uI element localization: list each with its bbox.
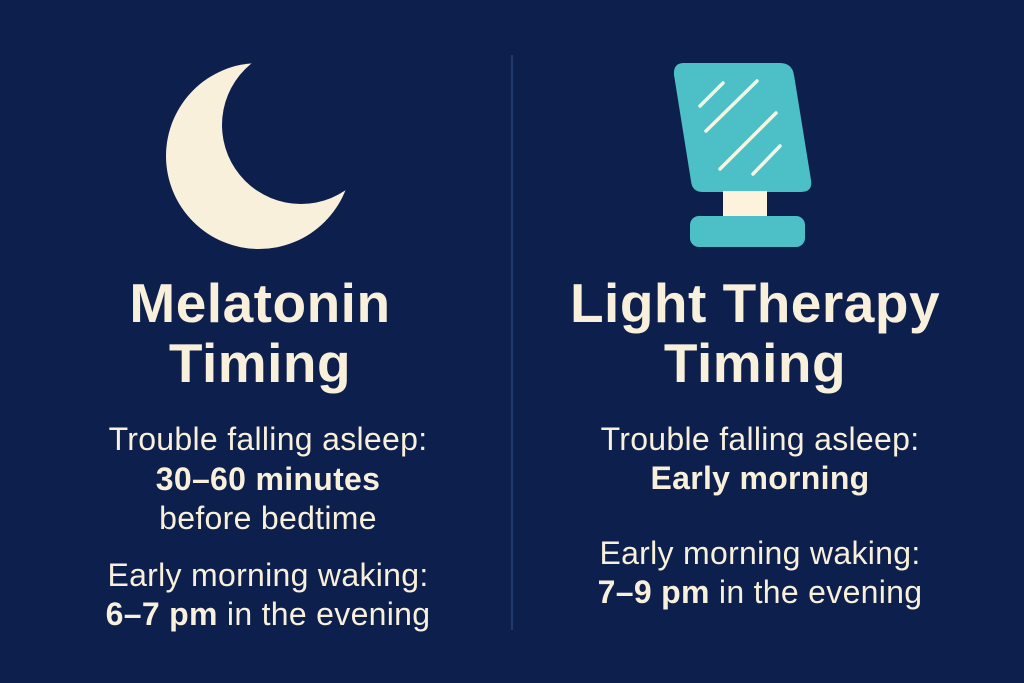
text: light therapy details: Early morning — [650, 460, 870, 496]
text: melatonin details: 6–7 pm in the evening — [106, 596, 430, 632]
heading: Light Therapy Timing: Timing — [664, 332, 846, 394]
text: light therapy details — [598, 421, 922, 610]
heading: Melatonin Timing — [129, 272, 391, 394]
heading: Light Therapy Timing — [570, 272, 940, 394]
text: melatonin details: 30–60 minutes — [156, 461, 380, 497]
heading: Light Therapy Timing: Light Therapy — [570, 272, 940, 334]
text: melatonin details — [106, 421, 430, 632]
heading: Melatonin Timing: Melatonin — [129, 272, 391, 334]
text: melatonin details: Trouble falling asleep: — [109, 421, 427, 457]
text: light therapy details: Trouble falling asleep: — [601, 421, 919, 457]
text: melatonin details: Early morning waking: — [107, 557, 429, 593]
text: melatonin details: before bedtime — [159, 500, 377, 536]
text: light therapy details: Early morning waking: — [599, 535, 921, 571]
divider — [511, 55, 513, 630]
heading: Melatonin Timing: Timing — [169, 332, 351, 394]
icon: moon — [166, 63, 346, 249]
text: light therapy details: 7–9 pm in the evening — [598, 574, 922, 610]
